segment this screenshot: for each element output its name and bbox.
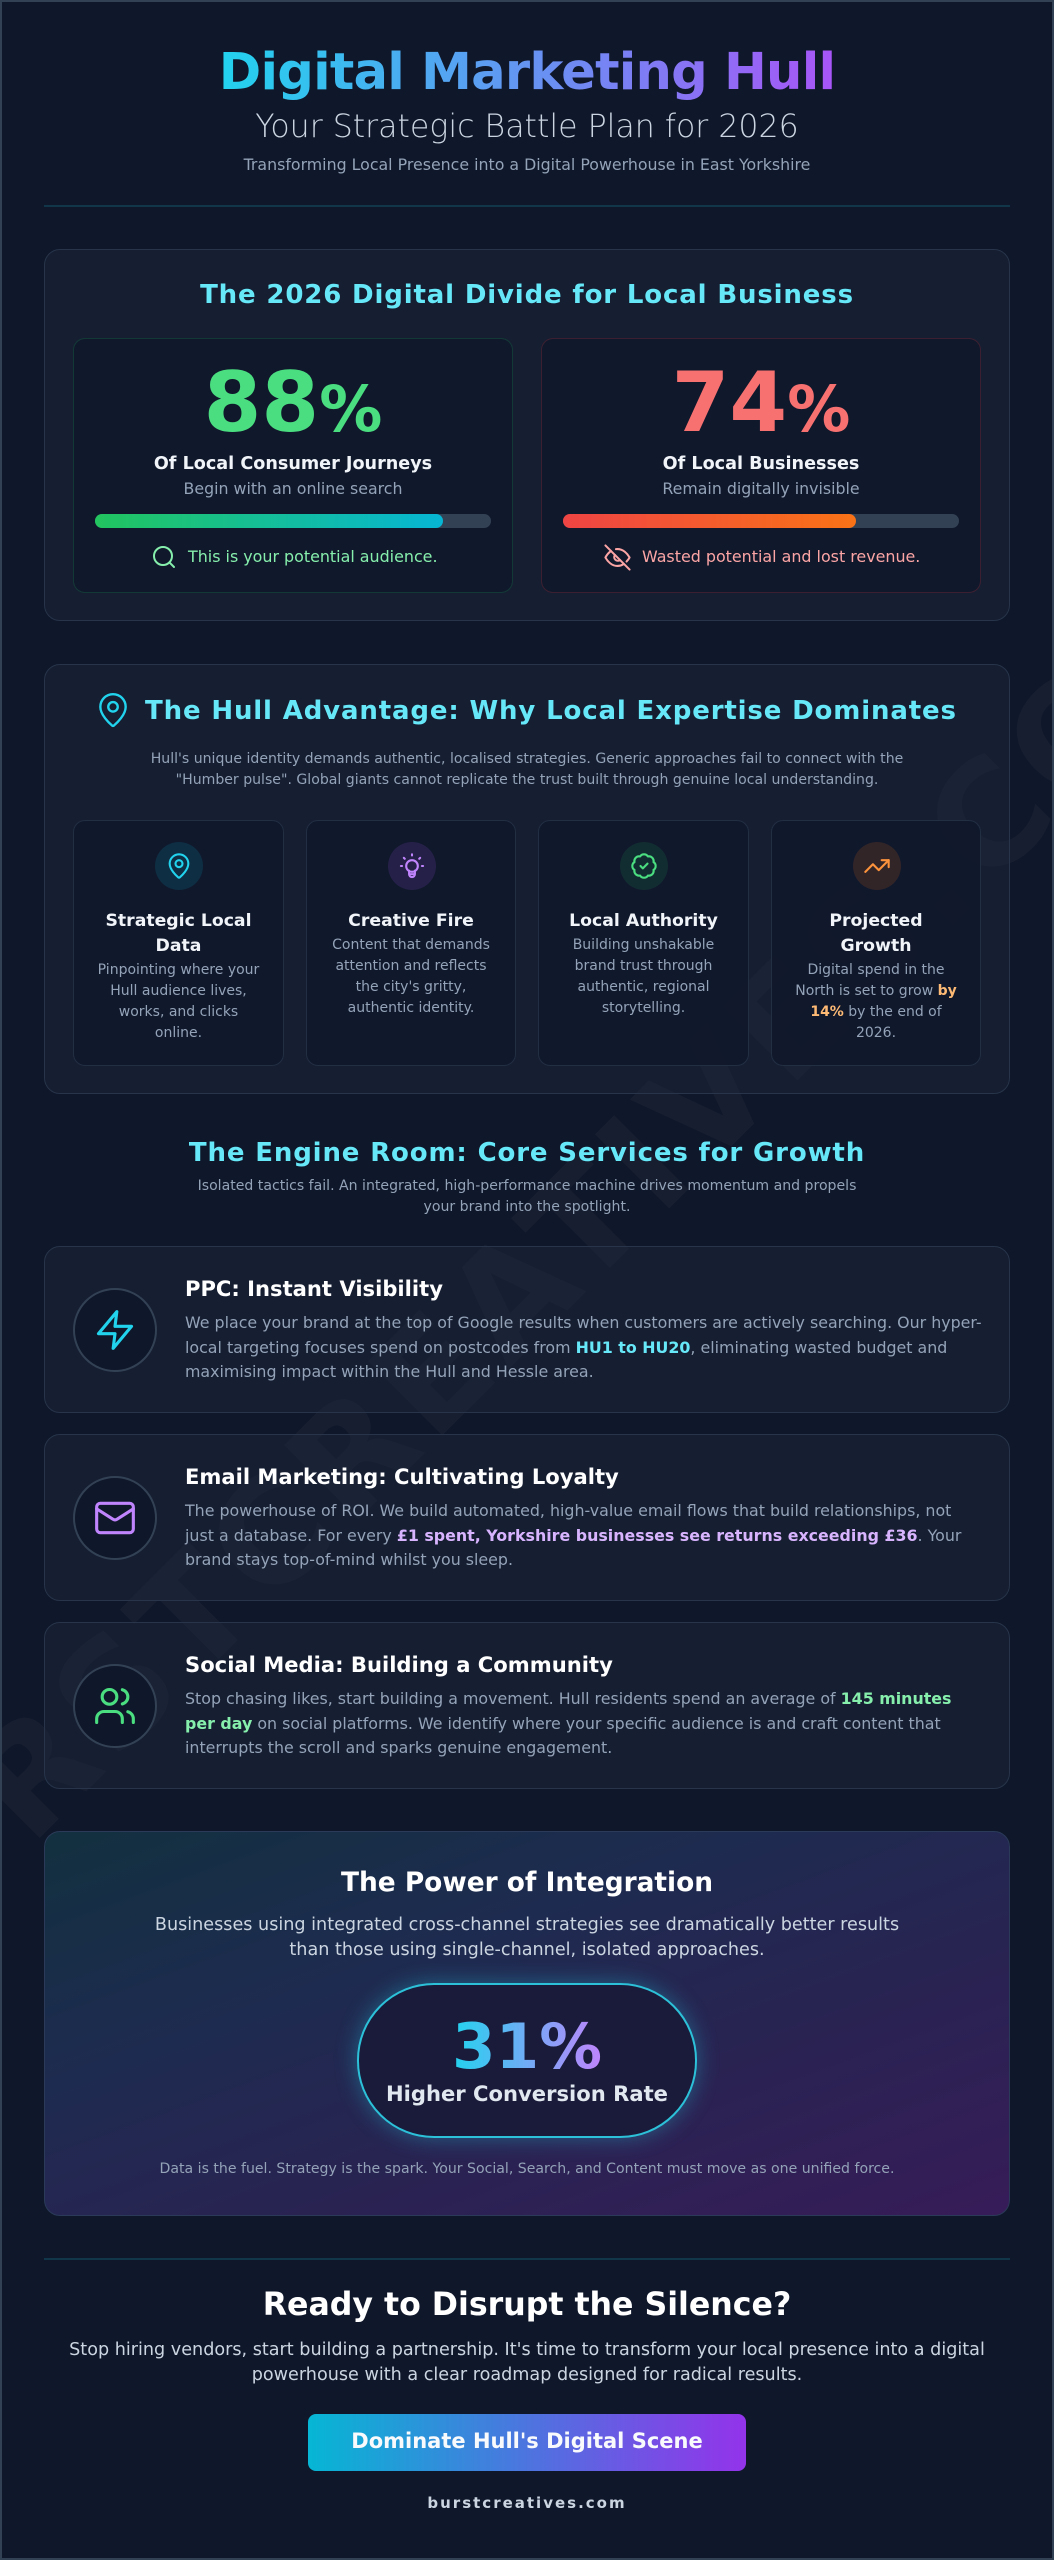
card text (98, 962, 260, 1041)
heading: digital divide: The 2026 Digital Divide for Local Business (200, 280, 854, 310)
integration text (155, 1915, 899, 1960)
icon: trend up (853, 842, 901, 890)
integration text: than those using single-channel, isolated approaches. (289, 1940, 765, 1960)
card title: Creative Fire (348, 911, 474, 931)
service text: We place your brand at the top of Google results when customers are actively searching. Our hyper- (185, 1313, 982, 1332)
icon: envelope (73, 1476, 157, 1560)
card text: works, and clicks (119, 1004, 238, 1020)
icon: eye off (604, 544, 631, 571)
label: Of Local Consumer Journeys (154, 454, 432, 474)
integration text: Businesses using integrated cross-channel strategies see dramatically better results (155, 1915, 899, 1935)
card title: Strategic Local (105, 911, 252, 931)
engine room intro (198, 1178, 856, 1215)
service: PPC (44, 1246, 1010, 1413)
call to action text: Stop hiring vendors, start building a partnership. It's time to transform your local presence into a digital (69, 2340, 985, 2360)
panel: power of integration (44, 1831, 1010, 2216)
heading: integration: The Power of Integration (341, 1867, 713, 1898)
service text: The powerhouse of ROI. We build automated, high-value email flows that build relationships, not (185, 1501, 951, 1520)
tagline: Transforming Local Presence into a Digital Powerhouse in East Yorkshire (244, 155, 810, 174)
card title: Projected (829, 911, 923, 931)
heading: hull advantage: The Hull Advantage: Why Local Expertise Dominates (145, 696, 957, 726)
card text: authentic, regional (577, 979, 710, 995)
label: Of Local Businesses (663, 454, 859, 474)
service text (185, 1689, 951, 1757)
icon: search (153, 546, 175, 568)
card text (795, 962, 957, 1041)
service text (184, 1501, 962, 1569)
panel: hull advantage (44, 664, 1010, 1094)
service title: Social Media: Building a Community (185, 1652, 613, 1677)
sublabel: Remain digitally invisible (662, 479, 860, 498)
caption: This is your potential audience. (188, 547, 438, 566)
card title (105, 911, 252, 956)
stat number: 31% (452, 2010, 602, 2083)
card title: Data (156, 936, 201, 956)
progress bar (95, 514, 491, 528)
caption: Wasted potential and lost revenue. (642, 547, 920, 566)
service text: interrupts the scroll and sparks genuine engagement. (185, 1738, 612, 1757)
intro text: Hull's unique identity demands authentic, localised strategies. Generic approaches fail to connect with the (151, 751, 903, 767)
intro text (151, 751, 903, 788)
card text: storytelling. (602, 1000, 685, 1016)
icon: bulb badge (388, 842, 436, 890)
service text (185, 1313, 982, 1381)
service text: per day on social platforms. We identify where your specific audience is and craft content that (185, 1714, 941, 1732)
service: email (44, 1434, 1010, 1601)
card: 88 percent (73, 338, 513, 593)
heading: call to action: Ready to Disrupt the Silence? (263, 2287, 791, 2323)
progress bar (563, 514, 959, 528)
intro text: "Humber pulse". Global giants cannot replicate the trust built through genuine local understanding. (176, 772, 878, 788)
card text: 2026. (856, 1025, 896, 1041)
card title (829, 911, 923, 956)
card text: Content that demands (332, 937, 490, 953)
card: strategic local data (73, 820, 284, 1066)
service text: brand stays top-of-mind whilst you sleep. (185, 1550, 513, 1569)
service text: Stop chasing likes, start building a movement. Hull residents spend an average of 145 minutes (185, 1689, 951, 1708)
service text: just a database. For every £1 spent, Yorkshire businesses see returns exceeding £36. Your (185, 1526, 961, 1544)
card: creative fire (306, 820, 516, 1066)
icon: lightning bolt (73, 1288, 157, 1372)
card title: Growth (840, 936, 912, 956)
card text (573, 937, 714, 1016)
subtitle: Your Strategic Battle Plan for 2026 (255, 109, 799, 145)
button (308, 2414, 746, 2471)
stat pill: 31% (357, 1983, 697, 2138)
sublabel: Begin with an online search (184, 479, 402, 498)
card: 74 percent (541, 338, 981, 593)
panel: digital divide (44, 249, 1010, 621)
card: local authority (538, 820, 749, 1066)
call to action text (69, 2340, 985, 2384)
integration footnote: Data is the fuel. Strategy is the spark. Your Social, Search, and Content must move as one unified force. (160, 2161, 894, 2177)
stat label: Higher Conversion Rate (386, 2081, 668, 2106)
card text: brand trust through (575, 958, 712, 974)
icon: pin badge (155, 842, 203, 890)
engine room intro: your brand into the spotlight. (424, 1199, 630, 1215)
service text: maximising impact within the Hull and Hessle area. (185, 1362, 594, 1381)
call to action text: powerhouse with a clear roadmap designed for radical results. (252, 2364, 802, 2384)
card text (332, 937, 490, 1016)
stat: 74%: 74% (672, 354, 850, 451)
service text: local targeting focuses spend on postcodes from HU1 to HU20, eliminating wasted budget and (185, 1338, 947, 1356)
card text: Digital spend in the (807, 962, 945, 978)
heading: engine room: The Engine Room: Core Services for Growth (189, 1138, 865, 1168)
card text: attention and reflects (335, 958, 487, 974)
card text: authentic identity. (348, 1000, 474, 1016)
card text: Building unshakable (573, 937, 714, 953)
icon: map pin (99, 693, 127, 728)
icon: badge check (620, 842, 668, 890)
service title: Email Marketing: Cultivating Loyalty (185, 1464, 619, 1489)
title: Digital Marketing Hull (219, 42, 835, 102)
service: social (44, 1622, 1010, 1789)
website: burstcreatives.com (427, 2494, 627, 2512)
card text: Hull audience lives, (110, 983, 247, 999)
stat: 88%: 88% (204, 354, 382, 451)
button: Dominate Hull's Digital Scene (351, 2429, 703, 2453)
card text: the city's gritty, (356, 979, 466, 995)
card title: Local Authority (569, 911, 718, 931)
icon: users (73, 1664, 157, 1748)
card text: Pinpointing where your (98, 962, 259, 978)
card text: online. (155, 1025, 202, 1041)
card text: North is set to grow by (795, 983, 957, 999)
service title: PPC: Instant Visibility (185, 1276, 443, 1301)
card text: 14% by the end of (810, 1004, 942, 1020)
card: projected growth (771, 820, 981, 1066)
engine room intro: Isolated tactics fail. An integrated, high-performance machine drives momentum and propels (198, 1178, 856, 1194)
